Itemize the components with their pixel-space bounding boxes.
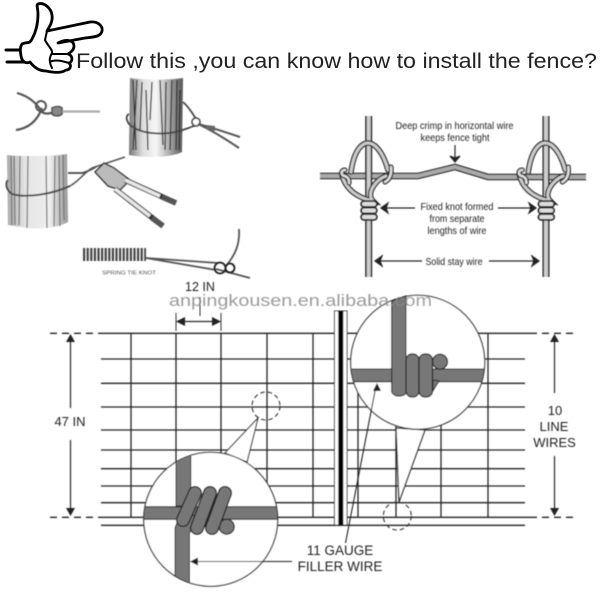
labels: lengths of wire <box>428 225 487 237</box>
icon: pointing hand <box>6 4 102 72</box>
fence post with bolt cutters <box>6 154 176 228</box>
labels: from separate <box>430 213 485 225</box>
arrows <box>375 145 539 266</box>
panel: crimped wire knot diagram <box>320 116 586 277</box>
magnified knot: bottom left <box>140 450 292 590</box>
spring tie knot <box>83 229 250 278</box>
dimension: 10 line wires: LINE <box>540 419 569 434</box>
title: Follow this ,you can know how to install the fence? <box>76 49 597 73</box>
dashed detail circles <box>252 392 411 530</box>
fence grid <box>50 333 575 525</box>
knot: left <box>342 143 391 217</box>
dimension: 10 line wires: WIRES <box>533 435 576 450</box>
labels: Solid stay wire <box>426 256 483 268</box>
dimension: 10 line wires: 10 <box>548 403 562 418</box>
callout wedges <box>225 418 425 502</box>
label: filler wire <box>298 543 382 574</box>
labels: keeps fence tight <box>420 132 490 144</box>
caption: SPRING TIE KNOT <box>102 270 156 276</box>
magnified knot: top right <box>345 295 490 429</box>
panel: fence specification drawing <box>50 280 576 590</box>
leader arrow <box>346 383 381 543</box>
dimension: 12 in: 12 IN <box>185 280 215 294</box>
wire knot illustration <box>16 93 100 130</box>
label: filler wire: FILLER WIRE <box>298 559 382 574</box>
fence post <box>334 311 347 525</box>
label: filler wire: 11 GAUGE <box>307 543 373 558</box>
labels <box>396 120 514 268</box>
labels: Deep crimp in horizontal wire <box>396 120 514 132</box>
panel: tying wire illustrations <box>6 78 250 278</box>
dimension: 12 in <box>176 280 221 331</box>
knot: right <box>519 143 568 217</box>
dimension: 47 in <box>54 334 86 516</box>
dimension: 10 line wires <box>533 334 576 516</box>
fence post with wire tie <box>127 78 240 157</box>
watermark: anpingkousen.en.alibaba.com <box>169 291 432 310</box>
dimension: 47 in: 47 IN <box>54 414 86 429</box>
labels: Fixed knot formed <box>420 201 494 213</box>
stay and line wires <box>320 116 586 277</box>
